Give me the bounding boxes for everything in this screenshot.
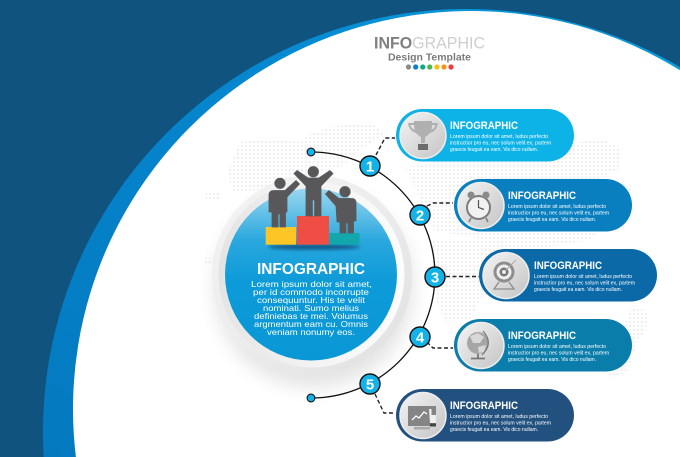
disc body text: Lorem ipsum dolor sit amet, — [251, 279, 372, 289]
panel: step 3 — [479, 249, 657, 302]
step 4 text: Lorem ipsum dolor sit amet, ludus perfecto — [508, 344, 606, 350]
step badge 1: 1 — [366, 158, 374, 176]
connector 2 — [427, 203, 453, 206]
panel: step 4: INFOGRAPHIC — [508, 330, 576, 342]
logo subtitle: Design Template — [388, 52, 471, 64]
icon: globe — [458, 322, 504, 368]
disc face — [225, 188, 397, 360]
disc heading: INFOGRAPHIC — [257, 261, 365, 278]
step 3 text — [534, 274, 635, 293]
title logo — [374, 34, 485, 70]
step 4 text: instructior pro eu, nec solum velit ex, partem — [508, 351, 609, 357]
connector 3 — [446, 276, 479, 278]
podium icon — [266, 166, 360, 245]
icon: trophy — [400, 112, 446, 158]
disc body text: consequuntur. His te velit — [257, 295, 366, 305]
podium shadow — [268, 244, 360, 250]
panel: step 5: INFOGRAPHIC — [450, 400, 518, 412]
icon: chart screen — [400, 392, 446, 438]
disc body text: per id commodo incorrupte — [253, 287, 369, 297]
step 5 text: Lorem ipsum dolor sit amet, ludus perfecto — [450, 414, 548, 420]
step 2 text — [508, 204, 609, 223]
panel: step 3: INFOGRAPHIC — [534, 260, 602, 272]
panel: step 1: INFOGRAPHIC — [450, 120, 518, 132]
step 2 text: Lorem ipsum dolor sit amet, ludus perfecto — [508, 204, 606, 210]
disc ring — [212, 175, 412, 375]
disc shadow — [214, 188, 414, 388]
timeline arc — [311, 152, 435, 398]
step badge 4 — [410, 327, 430, 347]
logo wordmark: INFOGRAPHIC — [374, 34, 485, 52]
panel: step 2: INFOGRAPHIC — [508, 190, 576, 202]
arc end dot — [307, 394, 315, 402]
step 3 text: graecis feugait ea eam. Vis dico nullam. — [534, 287, 622, 293]
step 5 text — [450, 414, 551, 433]
connector 1 — [376, 138, 395, 155]
step badge 5: 5 — [366, 376, 374, 394]
step 1 text: graecis feugait ea eam. Vis dico nullam. — [450, 147, 538, 153]
logo colour dots — [406, 64, 454, 70]
panel: step 1 — [396, 109, 574, 162]
step badge 5 — [360, 374, 380, 394]
disc body text — [251, 279, 372, 337]
disc body text: argmentum eam cu. Omnis — [254, 319, 368, 329]
icon: alarm clock — [458, 182, 504, 228]
step badge 2: 2 — [416, 208, 424, 224]
step 2 text: instructior pro eu, nec solum velit ex, partem — [508, 211, 609, 217]
connector 5 — [375, 394, 395, 413]
step 2 text: graecis feugait ea eam. Vis dico nullam. — [508, 217, 596, 223]
dotted world map — [204, 122, 648, 378]
step badge 1 — [360, 156, 380, 176]
step 5 text: graecis feugait ea eam. Vis dico nullam. — [450, 427, 538, 433]
step badge 2 — [410, 205, 430, 225]
disc body text: nominati. Sumo melius — [263, 303, 359, 313]
step 1 text: Lorem ipsum dolor sit amet, ludus perfecto — [450, 134, 548, 140]
step badge 3 — [425, 267, 445, 287]
step 3 text: instructior pro eu, nec solum velit ex, partem — [534, 281, 635, 287]
step 5 text: instructior pro eu, nec solum velit ex, partem — [450, 421, 551, 427]
panel: step 2 — [454, 179, 632, 232]
disc body text: veniam nonumy eos. — [267, 327, 355, 337]
step 4 text — [508, 344, 609, 363]
step badge 3: 3 — [431, 270, 439, 286]
disc body text: definiebas te mei. Volumus — [254, 311, 368, 321]
step 3 text: Lorem ipsum dolor sit amet, ludus perfecto — [534, 274, 632, 280]
step 1 text — [450, 134, 551, 153]
arc start dot — [307, 148, 315, 156]
step 4 text: graecis feugait ea eam. Vis dico nullam. — [508, 357, 596, 363]
step 1 text: instructior pro eu, nec solum velit ex, partem — [450, 141, 551, 147]
panel: step 5 — [396, 389, 574, 442]
panel: step 4 — [454, 319, 632, 372]
central disc — [212, 166, 414, 388]
icon: target — [483, 252, 529, 298]
connector 4 — [427, 342, 453, 348]
step badge 4: 4 — [416, 330, 425, 346]
